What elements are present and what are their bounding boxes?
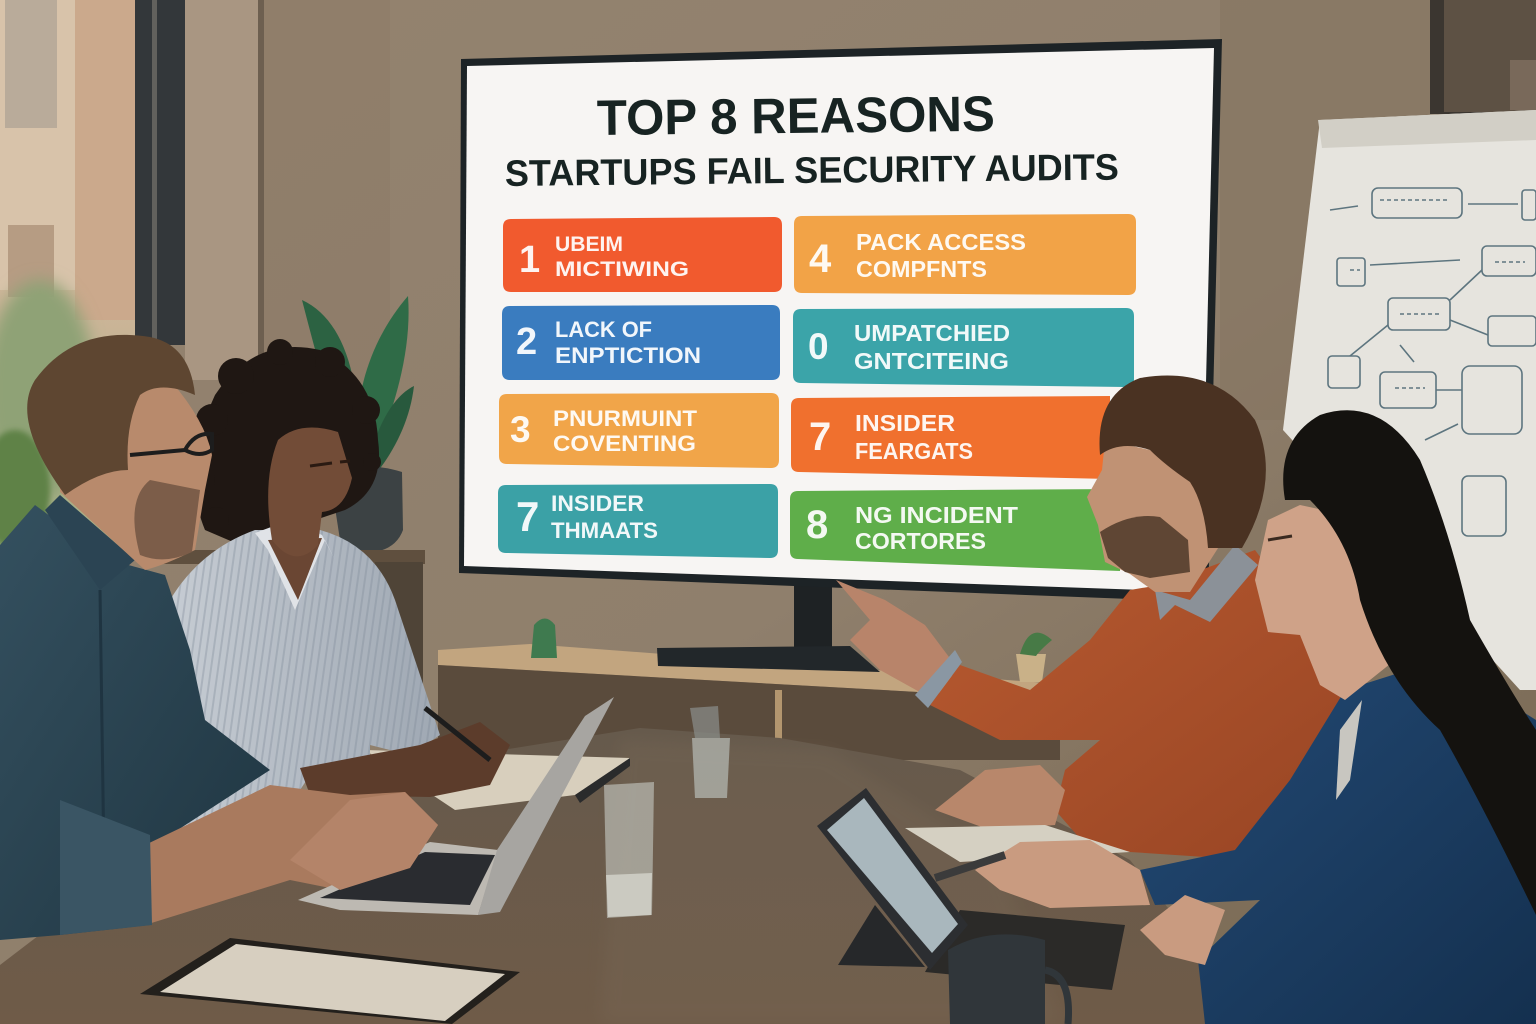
notebook on table near woman [365,750,630,810]
card 7 insider threats: THMAATS [551,518,658,543]
card 7 insider feargats: 7 [809,415,831,459]
card 4: 4 [809,237,832,281]
card 7 insider feargats [791,396,1110,479]
forearm and hand [145,785,438,925]
undershirt [1336,700,1362,800]
hand with stylus [975,840,1150,908]
face and neck [1255,505,1395,700]
potted plant [302,296,414,553]
card 3: 3 [510,409,531,450]
window with building view [0,0,264,560]
side shelf [145,550,425,732]
face [1087,440,1220,592]
head [53,366,212,570]
presentation screen [459,39,1222,602]
title: TOP 8 REASONS [597,86,995,146]
card 0: UMPATCHIED [854,320,1010,346]
person: woman in striped blouse [170,339,510,840]
hair [1283,410,1536,915]
card 7 insider feargats: INSIDER [855,410,955,436]
card 8: CORTORES [855,528,986,554]
lower hand [1140,895,1225,965]
card 1: MICTIWING [555,258,689,281]
card 3: PNURMUINT [553,406,698,431]
card 8: NG INCIDENT [855,502,1018,528]
card 7 insider threats: INSIDER [551,491,644,516]
card 7 insider threats [498,484,778,558]
card 4 [794,214,1136,295]
clipboard with document [140,938,520,1024]
man's hand on laptop [290,792,438,890]
striped collar [1155,545,1258,622]
flip chart whiteboard [1283,110,1536,690]
conference table [0,728,1260,1024]
card 2: 2 [516,321,537,363]
card 0: GNTCITEING [854,348,1009,374]
card 8: 8 [806,503,828,547]
title: STARTUPS FAIL SECURITY AUDITS [505,147,1119,194]
card 7 insider feargats: FEARGATS [855,438,973,464]
forearm and hand [300,722,510,797]
card 2 [502,305,780,380]
title [505,86,1119,194]
card 1: UBEIM [555,233,623,256]
person: woman with dark hair and navy cardigan [935,410,1536,1024]
card 3 [499,393,779,468]
pointing hand [836,580,955,695]
monitor stand [657,585,880,672]
card 2: LACK OF [555,317,652,342]
credenza under screen [438,618,1060,760]
card 4: PACK ACCESS [856,229,1026,255]
hair [1100,376,1266,548]
tablet on stand [817,788,1125,990]
mug [948,934,1069,1024]
card 2: ENPTICTION [555,343,701,368]
card 1: 1 [519,239,540,281]
dark panel upper right [1430,0,1536,114]
face [268,428,352,556]
water glasses [604,706,730,918]
papers on table [905,825,1130,862]
card 0 [793,308,1134,387]
lower hand [935,765,1065,830]
card 7 insider threats: 7 [516,493,539,540]
hair [27,335,195,495]
person: man on left [0,335,438,940]
torso [930,550,1345,860]
card 8 [790,489,1120,571]
person: man in orange sweater [836,376,1345,860]
laptop [298,697,614,915]
blouse [170,530,440,840]
card 0: 0 [808,326,829,367]
cardigan [1140,660,1536,1024]
pen [425,708,490,760]
card 3: COVENTING [553,431,696,456]
glasses [130,434,212,455]
hair [189,339,381,545]
torso in denim shirt [0,505,270,940]
card 1 [503,217,782,292]
beard [1100,516,1190,578]
card 4: COMPFNTS [856,256,987,282]
